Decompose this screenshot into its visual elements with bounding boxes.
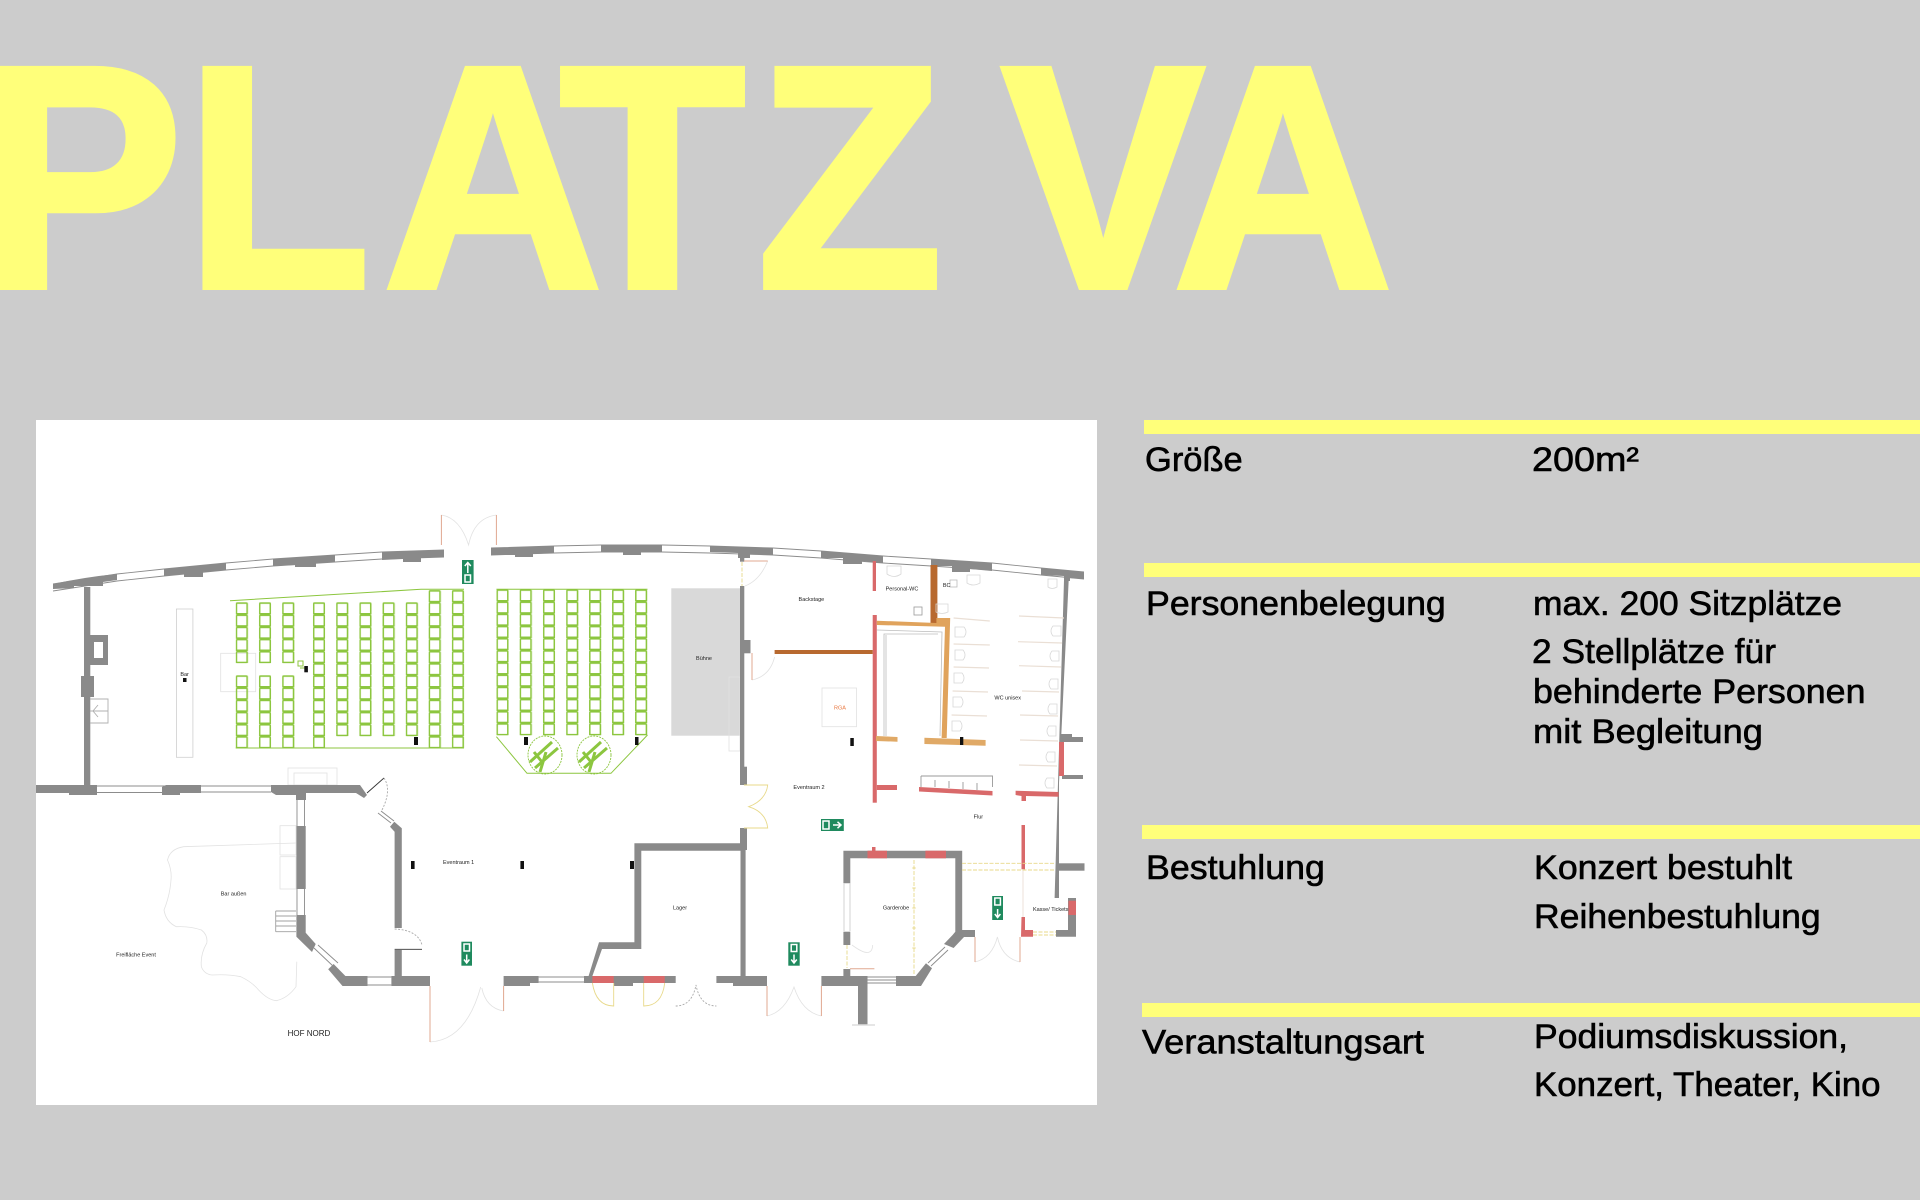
room labels: Bühne [696, 656, 712, 662]
row: Veranstaltungsart: Podiumsdiskussion, [1534, 1018, 1848, 1056]
row: Bestuhlung: Bestuhlung [1146, 849, 1325, 887]
WC fixtures [887, 566, 1064, 788]
room labels: Bar [180, 672, 189, 678]
room labels: Backstage [799, 597, 824, 603]
row: Größe: 200m² [1532, 441, 1639, 479]
orange shaft walls [775, 565, 986, 746]
stage area [671, 588, 740, 736]
room labels: Freifläche Event [116, 953, 156, 959]
room labels: Lager [673, 905, 687, 911]
icon: wheelchair places [528, 736, 611, 774]
seating: right block [496, 589, 648, 773]
row: Personenbelegung [1144, 563, 1920, 751]
door swings [430, 515, 1056, 1042]
icons: speakers [183, 666, 963, 869]
room labels: HOF NORD [288, 1029, 331, 1038]
seating: left block [230, 589, 464, 748]
room labels: Flur [974, 814, 983, 820]
room labels: BC [943, 583, 951, 589]
red partitions [592, 561, 1076, 983]
row: Größe [1144, 420, 1920, 479]
title: PLATZ VA [0, 0, 1393, 354]
room labels: Kasse/ Tickets [1033, 907, 1069, 913]
row: Bestuhlung: Reihenbestuhlung [1534, 898, 1821, 936]
top wall with windows [53, 545, 1084, 591]
row: Personenbelegung: mit Begleitung [1533, 713, 1763, 751]
row: Veranstaltungsart: Veranstaltungsart [1142, 1024, 1425, 1062]
row: Personenbelegung: max. 200 Sitzplätze [1533, 585, 1842, 623]
row: Personenbelegung: 2 Stellplätze für [1532, 633, 1776, 671]
row: Größe: Größe [1145, 441, 1243, 479]
row: Veranstaltungsart: Konzert, Theater, Kino [1534, 1066, 1881, 1104]
room labels: Eventraum 1 [443, 860, 474, 866]
row: Veranstaltungsart [1142, 1003, 1920, 1104]
row: Personenbelegung: Personenbelegung [1146, 585, 1446, 623]
row: Bestuhlung: Konzert bestuhlt [1534, 849, 1793, 887]
panel: floor plan [36, 420, 1097, 1105]
icons: exit signs [461, 560, 1003, 966]
room labels [116, 583, 1069, 1038]
room labels: WC unisex [994, 695, 1021, 701]
row: Personenbelegung: behinderte Personen [1533, 673, 1866, 711]
room labels: RGA [834, 705, 846, 711]
row: Bestuhlung [1142, 825, 1920, 936]
room labels: Garderobe [883, 905, 909, 911]
interior and exterior walls [36, 557, 1084, 1024]
windows and thin lines [90, 699, 1023, 1025]
room labels: Personal-WC [886, 586, 918, 592]
room labels: Eventraum 2 [793, 785, 825, 791]
faint fixtures [164, 515, 1020, 1042]
room labels: Bar außen [221, 892, 246, 898]
